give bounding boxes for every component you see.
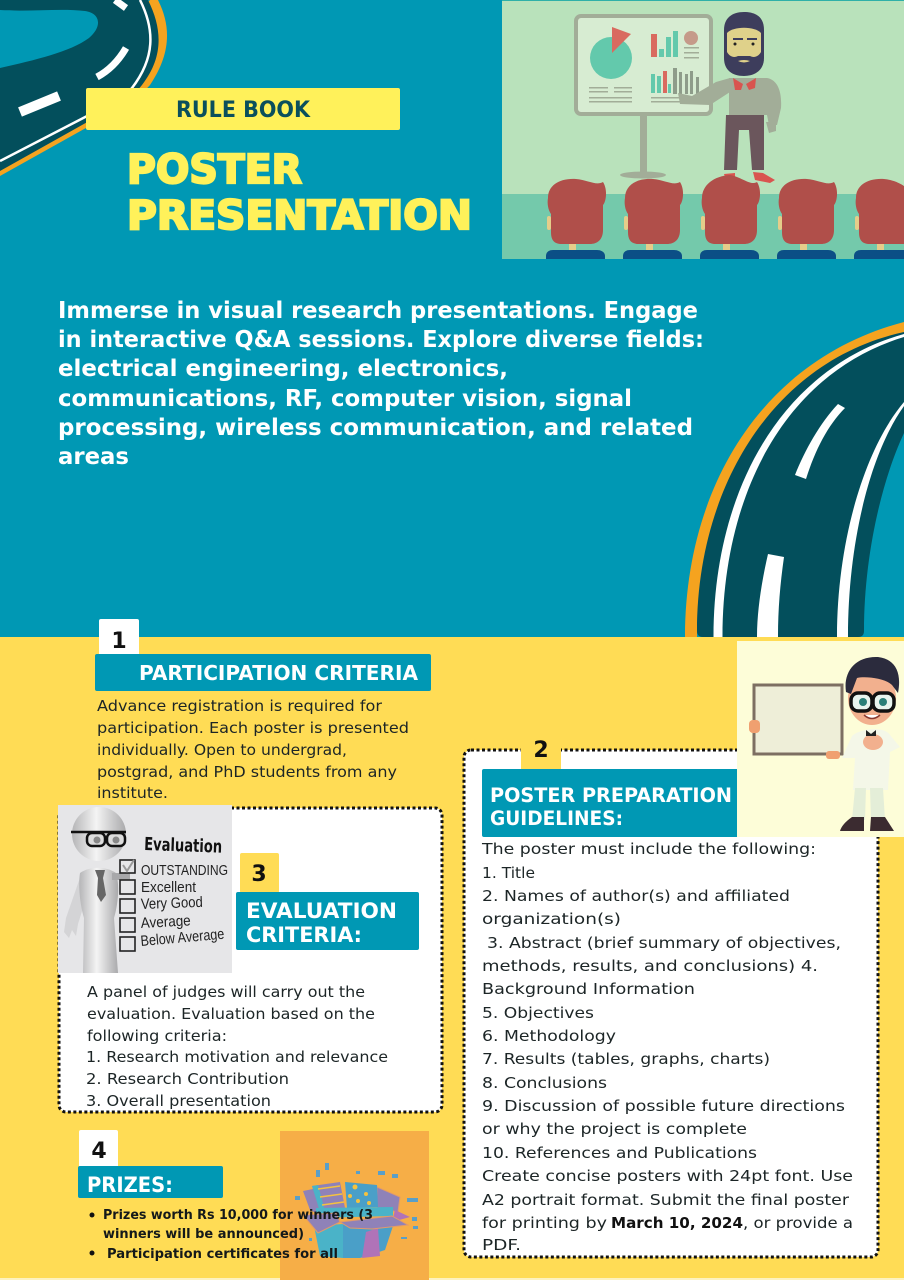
panel: participation criteria <box>95 619 431 802</box>
icon: presentation board <box>576 16 711 178</box>
text block: poster requirements: 9. Discussion of possible future directions <box>482 1097 845 1115</box>
heading: prizes: PRIZES: <box>87 1173 173 1197</box>
text block: evaluation rules: 3. Overall presentation <box>86 1092 271 1110</box>
text block: poster requirements: March 10, 2024 <box>611 1214 743 1232</box>
panel: prizes <box>78 1130 429 1280</box>
icon: top-left road <box>0 0 167 176</box>
text block: poster requirements: Background Information <box>482 980 695 998</box>
text block: introduction: areas <box>58 442 129 470</box>
number tab 3: 3 <box>251 862 267 887</box>
illustration: evaluation checklist figure: Below Average <box>140 926 225 950</box>
text block: poster requirements: organization(s) <box>482 910 621 928</box>
illustration: evaluation checklist figure: Very Good <box>141 894 203 913</box>
text block: poster requirements: 2. Names of author(s) and affiliated <box>482 887 790 905</box>
text block: poster requirements: 6. Methodology <box>482 1027 616 1045</box>
number tab 2 <box>521 738 561 771</box>
illustration: presenter with audience <box>502 0 904 259</box>
icon: right road <box>685 322 904 637</box>
icon: bearded presenter <box>678 12 781 183</box>
text block: prize list <box>90 1207 373 1262</box>
text block: poster requirements: The poster must include the following: <box>481 840 816 858</box>
text block: prize list: Participation certificates for all <box>107 1246 338 1262</box>
illustration: evaluation checklist figure: Evaluation <box>144 834 223 858</box>
text block: participation rules: participation. Each poster is presented <box>97 719 409 737</box>
text block: participation rules: Advance registration is required for <box>97 697 383 715</box>
heading: poster preparation guidelines: GUIDELINES: <box>490 807 623 830</box>
heading: participation criteria: PARTICIPATION CRITERIA <box>139 661 419 685</box>
text block: poster requirements <box>481 840 853 1254</box>
text block: poster requirements: 7. Results (tables, graphs, charts) <box>482 1050 770 1068</box>
text block: introduction: electrical engineering, electronics, <box>58 354 508 382</box>
heading: participation criteria <box>95 654 431 691</box>
heading tag: rule book <box>86 88 400 130</box>
illustration: evaluation checklist figure <box>58 805 232 973</box>
text block: prize list: Prizes worth Rs 10,000 for winners (3 <box>103 1207 373 1223</box>
number tab 3 <box>240 853 279 893</box>
text block: poster requirements: 8. Conclusions <box>482 1074 607 1092</box>
illustration: evaluation checklist figure: OUTSTANDING <box>141 862 228 879</box>
text block: introduction: processing, wireless communication, and related <box>58 413 693 441</box>
text block: participation rules: individually. Open to undergrad, <box>97 741 347 759</box>
illustration: evaluation checklist figure: Average <box>140 912 191 932</box>
text block: introduction <box>58 296 704 470</box>
heading tag: rule book: RULE BOOK <box>176 98 311 123</box>
illustration: open gift box <box>280 1131 429 1280</box>
title <box>127 147 472 239</box>
heading: evaluation criteria: EVALUATION <box>246 899 397 923</box>
number tab 4: 4 <box>91 1139 107 1164</box>
heading: evaluation criteria <box>236 892 419 950</box>
text block: participation rules: institute. <box>97 784 168 802</box>
number tab 1 <box>99 619 139 657</box>
text block: poster requirements: 3. Abstract (brief summary of objectives, <box>487 934 841 952</box>
illustration: cartoon scientist holding blank board <box>737 641 904 837</box>
text block: introduction: in interactive Q&A sessions. Explore diverse fields: <box>58 325 704 353</box>
icon: audience heads <box>546 175 904 259</box>
text block: poster requirements: Create concise posters with 24pt font. Use <box>482 1167 853 1185</box>
text block: evaluation rules: 1. Research motivation and relevance <box>86 1048 388 1066</box>
text block: poster requirements: A2 portrait format. Submit the final poster <box>482 1191 850 1209</box>
text block: poster requirements: methods, results, and conclusions) 4. <box>482 957 818 975</box>
panel: evaluation criteria <box>58 805 442 1112</box>
text block: poster requirements: for printing by <box>482 1214 607 1232</box>
text block: participation rules: postgrad, and PhD students from any <box>97 763 397 781</box>
text block: evaluation rules: 2. Research Contribution <box>86 1070 289 1088</box>
heading: evaluation criteria: CRITERIA: <box>246 923 362 947</box>
text block: evaluation rules: evaluation. Evaluation based on the <box>87 1005 375 1023</box>
text block: participation rules <box>97 697 409 802</box>
text block: poster requirements: 10. References and Publications <box>482 1144 757 1162</box>
panel: poster preparation guidelines <box>464 738 878 1257</box>
heading: poster preparation guidelines: POSTER PREPARATION <box>490 784 732 807</box>
panel: teal header background <box>0 0 904 637</box>
heading: prizes <box>78 1166 223 1198</box>
text block: poster requirements: , or provide a <box>743 1214 853 1232</box>
text block: poster requirements: 1. Title <box>482 864 535 882</box>
title: PRESENTATION <box>127 193 472 239</box>
heading: poster preparation guidelines <box>482 769 740 837</box>
number tab 4 <box>79 1130 118 1168</box>
text block: poster requirements: PDF. <box>482 1236 521 1254</box>
number tab 2: 2 <box>533 738 549 763</box>
text block: prize list: winners will be announced) <box>103 1226 304 1242</box>
text block: poster requirements: or why the project is complete <box>482 1120 747 1138</box>
text block: introduction: communications, RF, computer vision, signal <box>58 384 632 412</box>
illustration: evaluation checklist figure: Excellent <box>141 879 197 896</box>
text block: evaluation rules <box>86 983 388 1110</box>
number tab 1: 1 <box>111 629 127 654</box>
text block: evaluation rules: A panel of judges will carry out the <box>87 983 365 1001</box>
title: POSTER <box>127 147 302 193</box>
text block: introduction: Immerse in visual research presentations. Engage <box>58 296 698 324</box>
text block: poster requirements: 5. Objectives <box>482 1004 594 1022</box>
text block: evaluation rules: following criteria: <box>87 1027 227 1045</box>
